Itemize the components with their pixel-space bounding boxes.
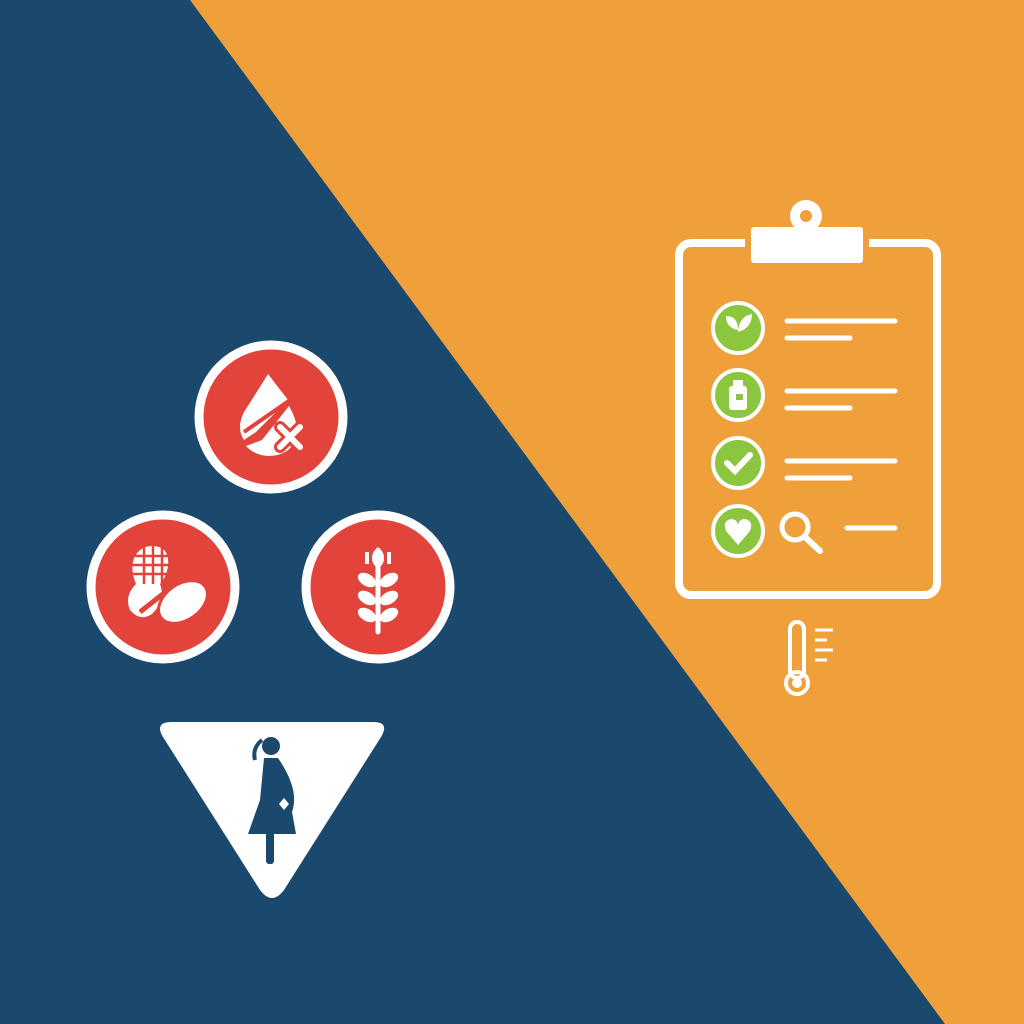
clipboard: [679, 200, 937, 595]
icon: wheat allergen circle: [306, 515, 450, 659]
icon: thermometer: [786, 622, 833, 694]
icon: drop allergen circle: [199, 345, 343, 489]
checklist item: bottle: [713, 370, 763, 420]
checklist lines: [787, 321, 895, 528]
checklist item: leaf: [713, 303, 763, 353]
icon: pregnancy warning triangle: [160, 722, 384, 898]
icon: peanut allergen circle: [91, 515, 235, 659]
clipboard clip: [748, 224, 866, 266]
checklist item: check: [713, 438, 763, 488]
checklist item: heart: [713, 506, 763, 556]
icon: magnifier: [782, 514, 820, 551]
